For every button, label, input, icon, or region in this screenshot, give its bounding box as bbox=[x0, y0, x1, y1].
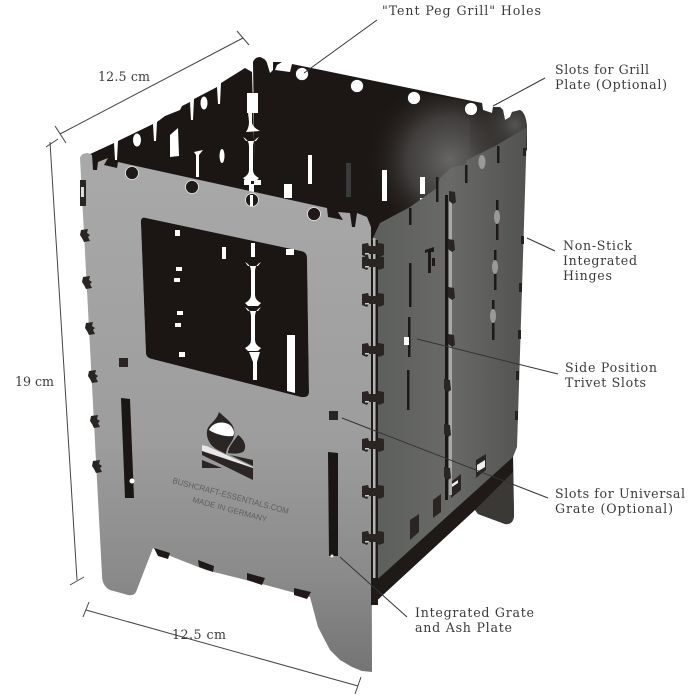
label: side position trivet slots bbox=[565, 360, 657, 390]
label: slots for grill plate: Plate (Optional) bbox=[555, 77, 667, 92]
right panel slots bbox=[407, 146, 500, 410]
right panel tabs bbox=[478, 155, 500, 323]
label: slots for grill plate bbox=[555, 62, 667, 92]
label: integrated grate and ash plate: Integrated Grate bbox=[415, 605, 534, 620]
dimension: top width bbox=[55, 31, 249, 143]
right panel bottom squares bbox=[410, 454, 486, 540]
label: slots for grill plate: Slots for Grill bbox=[555, 62, 649, 77]
label: non-stick hinges: Non-Stick bbox=[563, 238, 632, 253]
label: integrated grate and ash plate bbox=[415, 605, 534, 635]
label: non-stick hinges: Hinges bbox=[563, 268, 612, 283]
label: height: 19 cm bbox=[15, 374, 54, 389]
panel: left bbox=[88, 68, 261, 210]
left edge hinges bbox=[80, 180, 102, 473]
label: top width: 12.5 cm bbox=[98, 69, 150, 84]
label: non-stick hinges: Integrated bbox=[563, 253, 637, 268]
back panel corner tint bbox=[470, 103, 527, 170]
panel: front bbox=[80, 153, 384, 672]
window interior bbox=[141, 218, 309, 397]
back leg shade bbox=[475, 472, 514, 524]
back panel holes bbox=[296, 68, 478, 116]
label: side position trivet slots: Trivet Slots bbox=[565, 375, 646, 390]
corner hinge chain bbox=[243, 93, 261, 192]
label: tent peg grill holes: "Tent Peg Grill" Holes bbox=[382, 3, 541, 18]
leader lines bbox=[304, 20, 558, 617]
back panel highlights bbox=[360, 84, 527, 290]
left panel holes and slots bbox=[133, 96, 224, 177]
engraved url: BUSHCRAFT-ESSENTIALS.COM bbox=[171, 475, 290, 516]
logo: campfire bbox=[202, 412, 253, 480]
label: non-stick hinges bbox=[563, 238, 637, 283]
middle hinge bbox=[444, 191, 456, 500]
label: slots for universal grate: Slots for Universal bbox=[555, 486, 685, 501]
label: side position trivet slots: Side Position bbox=[565, 360, 657, 375]
bottom edge hinges bbox=[154, 548, 311, 599]
back panel slots bbox=[284, 155, 425, 209]
front right hinge column bbox=[362, 238, 384, 605]
front holes bbox=[126, 166, 320, 220]
engraved made in germany: MADE IN GERMANY bbox=[191, 495, 269, 524]
dimension: bottom width bbox=[83, 602, 361, 694]
side trivet window bbox=[404, 337, 409, 345]
label: bottom width: 12.5 cm bbox=[172, 627, 226, 642]
panel: right bbox=[372, 127, 527, 583]
panel: back bbox=[253, 57, 527, 290]
label: slots for universal grate bbox=[555, 486, 685, 516]
label: slots for universal grate: Grate (Optional) bbox=[555, 501, 673, 516]
front vertical slots bbox=[121, 398, 338, 558]
back leg and bottom strip bbox=[371, 452, 514, 606]
label: integrated grate and ash plate: and Ash Plate bbox=[415, 620, 512, 635]
dimension: height bbox=[46, 139, 84, 585]
hole see-through bbox=[250, 195, 253, 206]
view through window bbox=[174, 230, 295, 393]
right edge tabs bbox=[515, 148, 526, 420]
lower square highlights bbox=[452, 460, 485, 487]
front squares bbox=[119, 358, 338, 420]
